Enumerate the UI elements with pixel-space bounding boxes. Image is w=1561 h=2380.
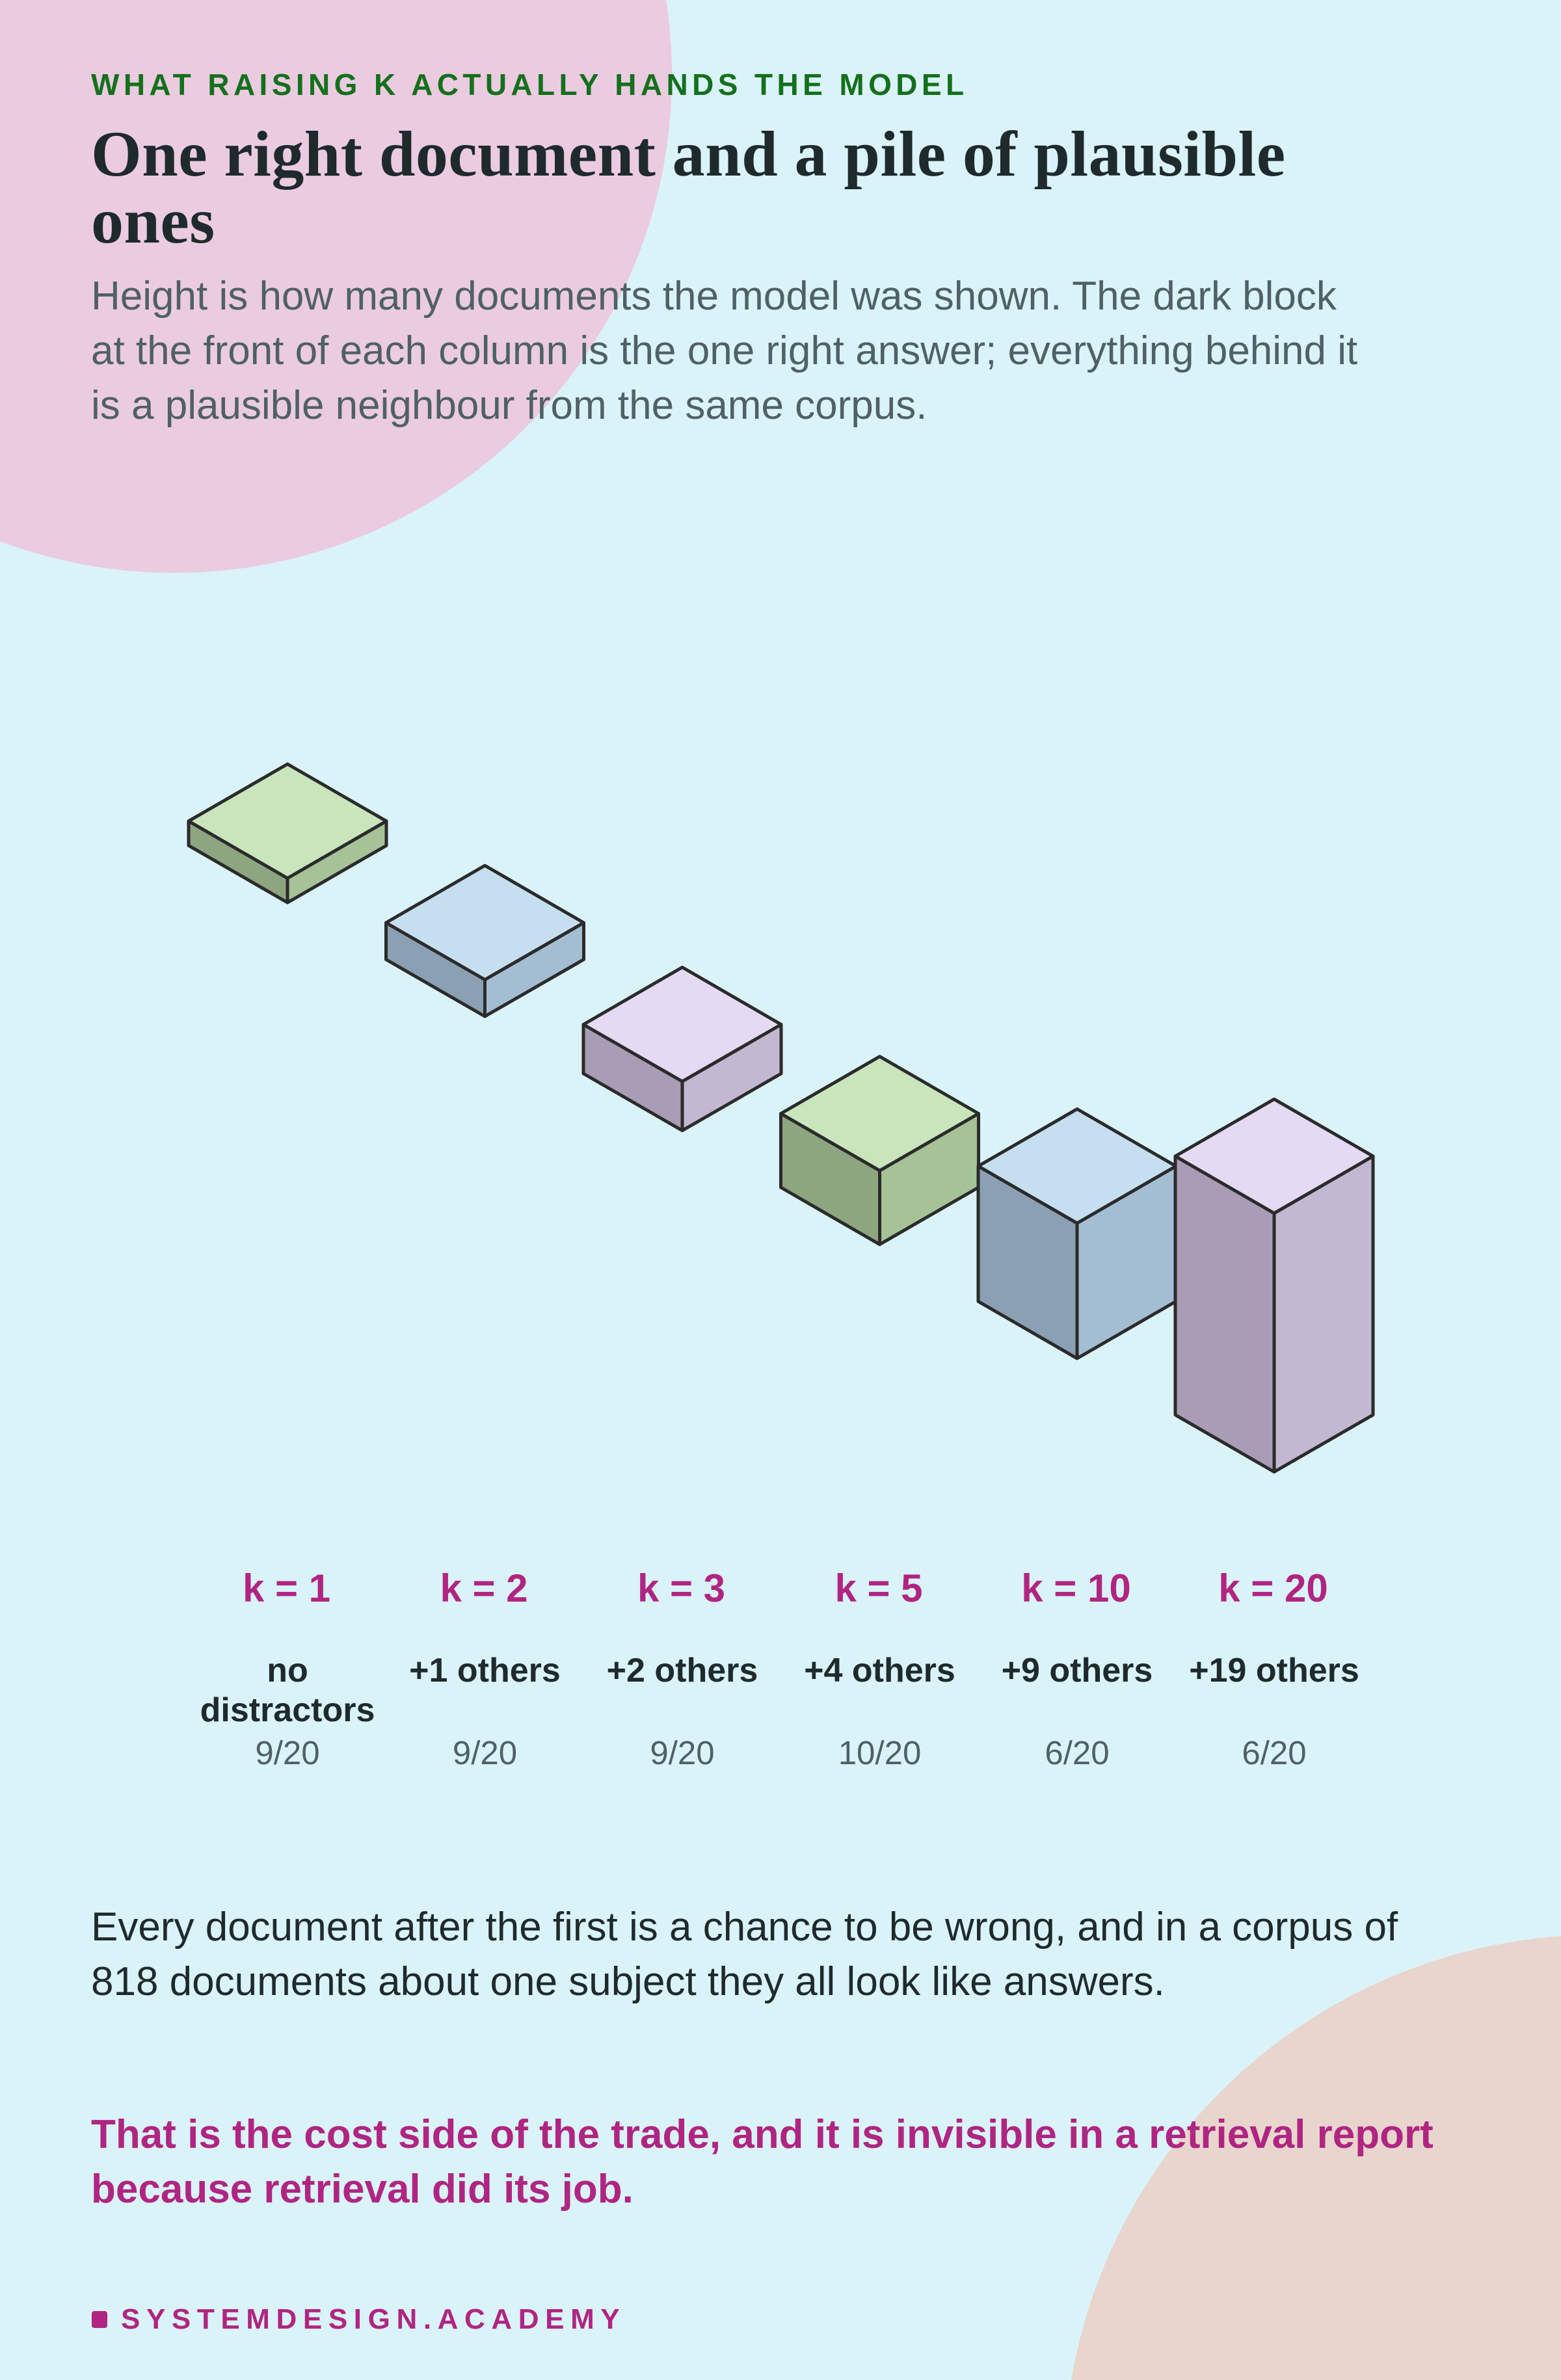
column: k = 20: [1175, 1099, 1373, 1472]
label: k = 3: +2 others: [607, 1652, 758, 1689]
callout text: because retrieval did its job.: [91, 2167, 634, 2212]
subtitle text block: Height is how many documents the model was shown. The dark block: [91, 274, 1337, 319]
decorative pink circle top left: [0, 0, 672, 573]
label: k = 2: [409, 1567, 561, 1771]
label: k = 5: +4 others: [804, 1652, 955, 1689]
column: k = 1: [189, 764, 386, 903]
label: k = 1: distractors: [200, 1691, 375, 1729]
label: k = 2: 9/20: [453, 1734, 517, 1771]
icon: brand square: [92, 2311, 107, 2328]
body text block: 818 documents about one subject they all look like answers.: [91, 1959, 1165, 2004]
isometric column chart: [189, 764, 1373, 1472]
body text block: Every document after the first is a chance to be wrong, and in a corpus of: [91, 1905, 1398, 1950]
label: k = 20: +19 others: [1189, 1652, 1359, 1689]
label: k = 5: [804, 1567, 955, 1771]
label: k = 10: +9 others: [1002, 1652, 1153, 1689]
column: k = 2: [386, 866, 584, 1016]
label: k = 10: 6/20: [1045, 1734, 1110, 1771]
label: k = 1: [200, 1567, 375, 1771]
subtitle text block: is a plausible neighbour from the same corpus.: [91, 383, 927, 428]
callout text: That is the cost side of the trade, and it is invisible in a retrieval report: [91, 2112, 1434, 2157]
label: k = 2: +1 others: [409, 1652, 561, 1689]
decorative peach circle bottom right: [1071, 1936, 1561, 2380]
label: k = 1: 9/20: [255, 1734, 320, 1771]
brand name: SYSTEMDESIGN.ACADEMY: [121, 2303, 626, 2335]
column: k = 5: [780, 1057, 978, 1245]
label: k = 10: k = 10: [1021, 1567, 1131, 1610]
label: k = 3: 9/20: [650, 1734, 715, 1771]
label: k = 3: [607, 1567, 758, 1771]
column: k = 10: [978, 1109, 1176, 1358]
title: ones: [91, 185, 215, 257]
title: One right document and a pile of plausible: [91, 118, 1285, 190]
eyebrow: WHAT RAISING K ACTUALLY HANDS THE MODEL: [91, 68, 968, 101]
label: k = 3: k = 3: [637, 1567, 725, 1610]
subtitle text block: at the front of each column is the one right answer; everything behind it: [91, 328, 1357, 373]
label: k = 5: k = 5: [834, 1567, 923, 1610]
label: k = 20: [1189, 1567, 1359, 1771]
label: k = 20: k = 20: [1218, 1567, 1328, 1610]
label: k = 5: 10/20: [838, 1734, 921, 1771]
label: k = 10: [1002, 1567, 1153, 1771]
label: k = 2: k = 2: [440, 1567, 528, 1610]
footer brand: [92, 2303, 626, 2335]
label: k = 1: k = 1: [243, 1567, 330, 1610]
column labels: [200, 1567, 1359, 1771]
label: k = 1: no: [267, 1652, 308, 1689]
label: k = 20: 6/20: [1242, 1734, 1307, 1771]
column: k = 3: [583, 968, 781, 1131]
